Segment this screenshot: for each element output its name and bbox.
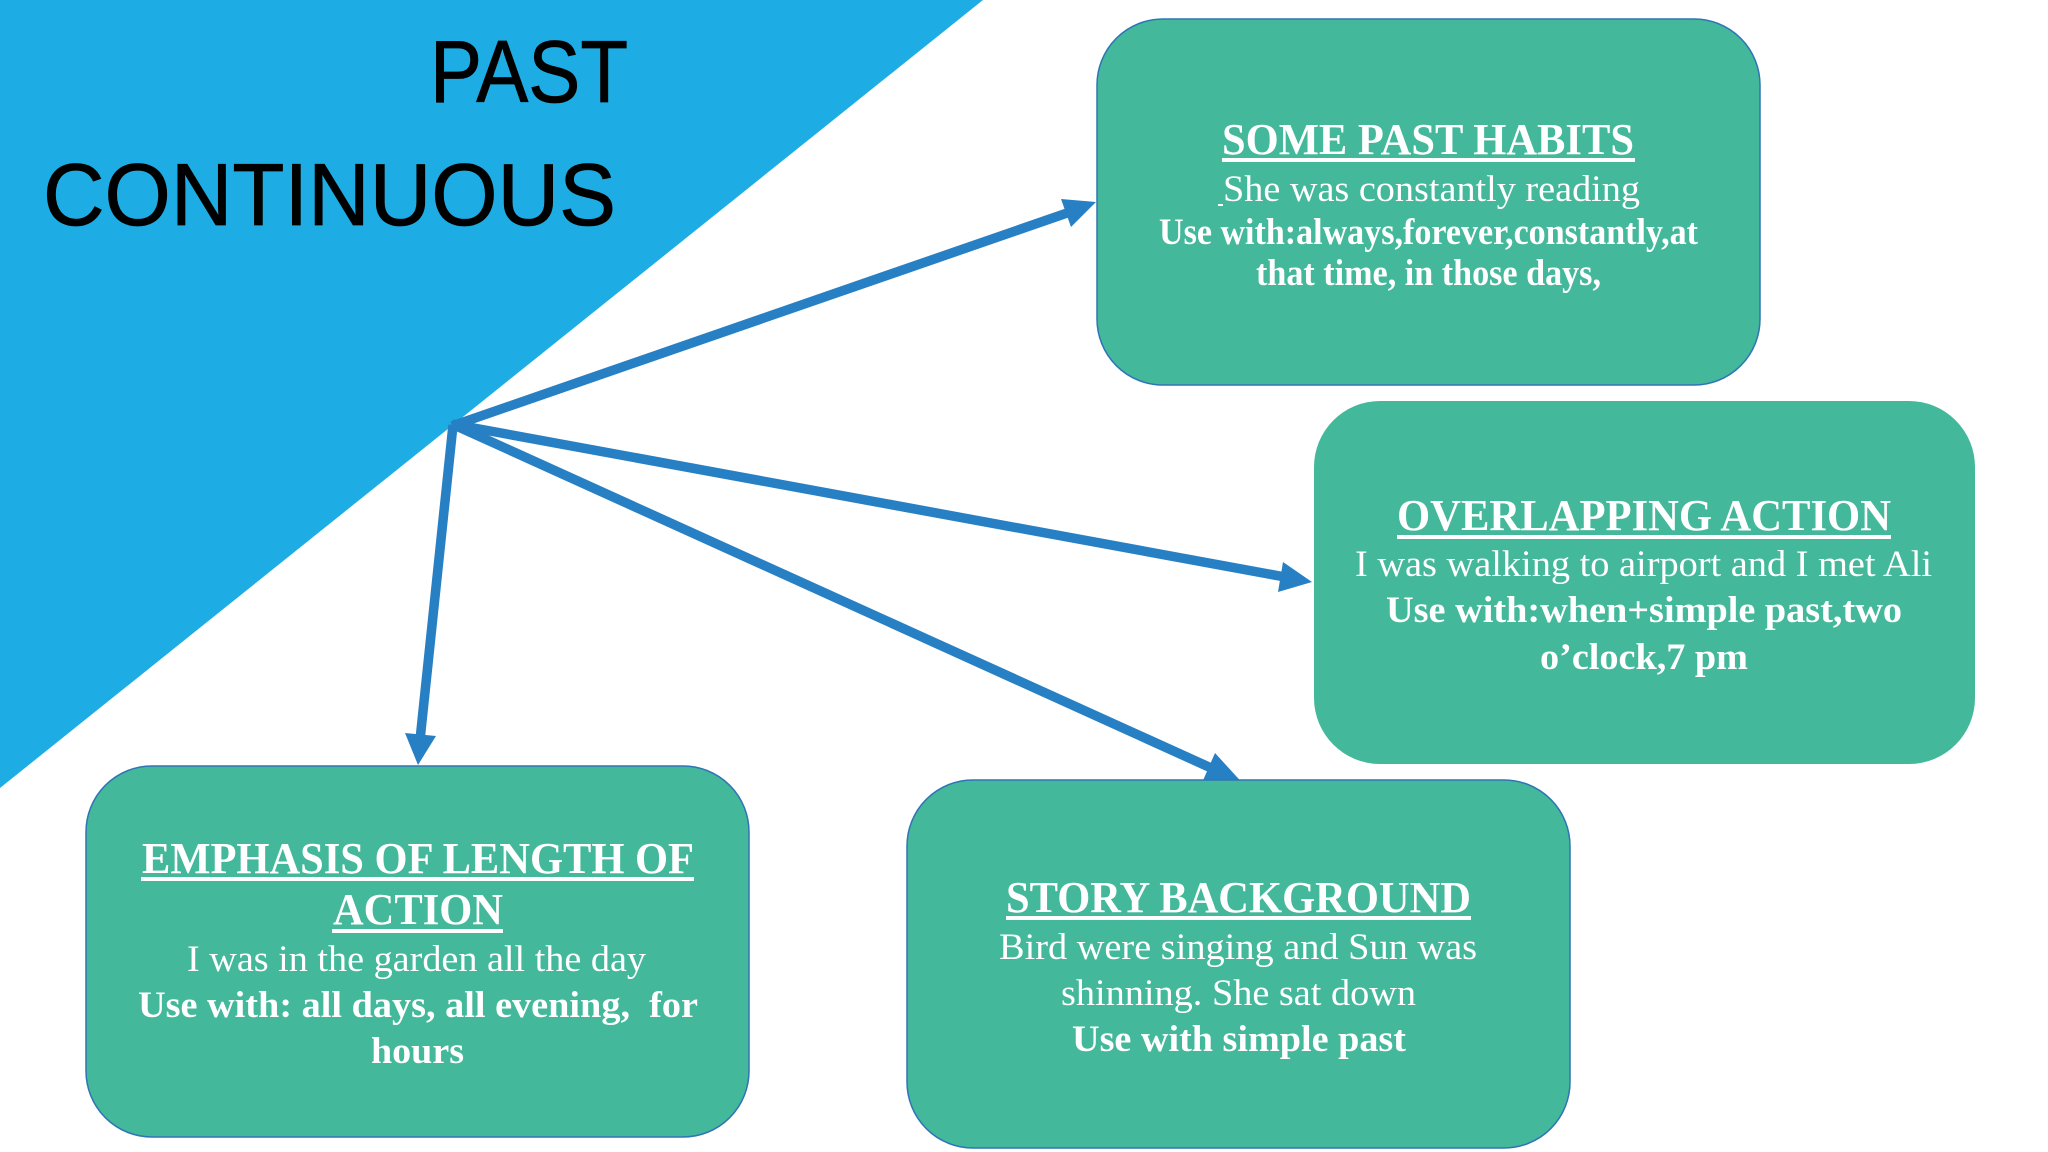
usage text: hours	[371, 1031, 464, 1072]
panel: some past habits	[1097, 19, 1760, 385]
example sentence: She was constantly reading	[1223, 169, 1640, 210]
panel: story background	[907, 780, 1570, 1148]
heading: overlapping action: OVERLAPPING ACTION	[1397, 491, 1891, 540]
usage text: that time, in those days,	[1256, 253, 1601, 294]
usage text	[1386, 590, 1902, 678]
panel: emphasis of length of action	[86, 766, 749, 1137]
heading: emphasis of length of action	[141, 834, 694, 934]
example sentence: shinning. She sat down	[1061, 973, 1416, 1014]
blue corner triangle	[0, 0, 983, 788]
arrow: to story background	[452, 424, 1247, 788]
arrow: to overlapping action	[452, 424, 1312, 592]
usage text: Use with: all days, all evening, for	[138, 985, 698, 1026]
panel: overlapping action	[1314, 401, 1975, 764]
usage text: Use with simple past	[1072, 1019, 1407, 1060]
example sentence: I was in the garden all the day	[187, 939, 647, 980]
title: PAST	[430, 22, 628, 121]
arrow: to some past habits	[452, 199, 1096, 426]
usage text: Use with:always,forever,constantly,at	[1159, 212, 1699, 253]
usage text	[1159, 212, 1699, 294]
usage text: o’clock,7 pm	[1540, 637, 1748, 678]
example sentence: I was walking to airport and I met Ali	[1355, 544, 1932, 585]
heading: emphasis of length of action: EMPHASIS OF LENGTH OF	[142, 834, 694, 883]
usage text	[138, 985, 698, 1072]
heading: emphasis of length of action: ACTION	[333, 885, 503, 934]
title: CONTINUOUS	[43, 145, 616, 244]
heading: story background: STORY BACKGROUND	[1006, 873, 1471, 922]
heading: some past habits: SOME PAST HABITS	[1222, 115, 1634, 164]
example sentence: Bird were singing and Sun was	[999, 927, 1477, 968]
usage text: Use with:when+simple past,two	[1386, 590, 1902, 631]
arrow: to emphasis of length of action	[405, 425, 453, 765]
title	[43, 22, 628, 244]
example sentence	[999, 927, 1477, 1014]
